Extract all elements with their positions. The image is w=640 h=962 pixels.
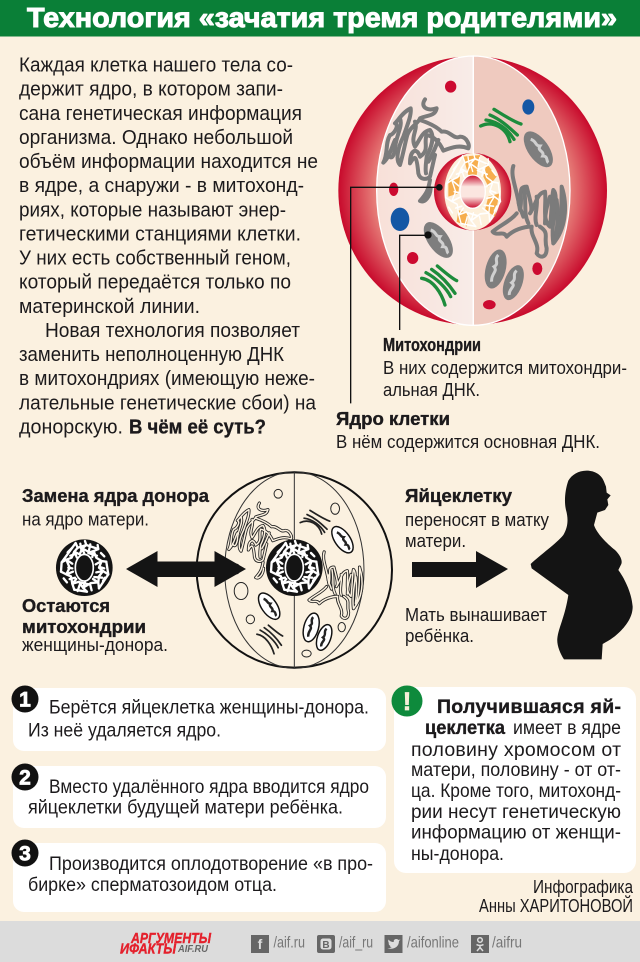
step 2 badge: 2: [19, 766, 31, 790]
conclusion panel: рии несут генетическую: [411, 801, 621, 823]
mother nucleus icon: [56, 539, 113, 596]
conclusion panel: ны-донора.: [411, 843, 504, 865]
intro text block: Новая технология позволяет: [45, 319, 301, 342]
intro text block: объём информации находится не: [19, 150, 318, 173]
exclamation badge: !: [403, 688, 411, 716]
intro text block: Каждая клетка нашего тела со-: [19, 54, 293, 76]
caption: egg transfer: [405, 486, 549, 551]
intro text block: донорскую.: [19, 415, 123, 438]
cell nucleus: [434, 153, 511, 230]
social: facebook: f: [258, 936, 263, 952]
publisher logo: AIF.RU: [177, 944, 209, 955]
caption: carrying the child: [405, 605, 547, 646]
social: odnoklassniki: /aifru: [492, 934, 522, 952]
social: twitter: [384, 934, 459, 953]
label: mitochondria: В них содержится митохондри-: [383, 358, 627, 378]
social: facebook: [251, 934, 305, 953]
step 3 badge: [12, 840, 38, 866]
social: vk: /aif_ru: [339, 934, 373, 952]
line-art donor cell: [197, 472, 392, 668]
social: twitter: /aifonline: [407, 934, 459, 952]
caption: egg transfer: Яйцеклетку: [405, 486, 512, 506]
caption: nucleus replacement: на ядро матери.: [22, 510, 149, 530]
step 3: [12, 840, 386, 912]
conclusion panel: информацию от женщи-: [411, 822, 621, 844]
conclusion panel: Получившаяся яй-: [437, 696, 621, 718]
step 3 badge: 3: [19, 842, 31, 866]
intro text block: [19, 54, 318, 438]
credit: [479, 877, 634, 916]
step 3: бирке» сперматозоидом отца.: [28, 874, 277, 896]
step 1: [12, 686, 386, 751]
organelles: green stacks: [422, 109, 521, 305]
double-headed arrow: [126, 551, 246, 587]
intro text block: лательные генетические сбои) на: [19, 391, 317, 414]
step 1: Берётся яйцеклетка женщины-донора.: [49, 696, 369, 718]
conclusion panel: [392, 686, 636, 873]
step 3: Производится оплодотворение «в про-: [49, 853, 373, 875]
conclusion panel: половину хромосом от: [411, 739, 621, 761]
caption: remaining mitochondria: митохондрии: [22, 617, 146, 637]
label: cell nucleus: Ядро клетки: [336, 409, 450, 429]
caption: carrying the child: ребёнка.: [405, 626, 474, 646]
intro text block: организма. Однако небольшой: [19, 126, 293, 149]
pointer lines: [351, 185, 442, 403]
step 2 badge: [12, 764, 38, 790]
step 1: Из неё удаляется ядро.: [28, 720, 221, 742]
colour cell diagram: [338, 56, 607, 403]
social: facebook: /aif.ru: [274, 934, 305, 952]
right arrow: [412, 551, 508, 588]
label: mitochondria: Митохондрии: [383, 335, 481, 355]
caption: nucleus replacement: [22, 486, 210, 530]
intro text block: сана генетическая информация: [19, 102, 302, 125]
conclusion panel: имеет в ядре: [513, 717, 621, 739]
publisher logo: АРГУМЕНТЫ: [130, 930, 212, 947]
social: odnoklassniki: [471, 934, 522, 953]
caption: egg transfer: матери.: [405, 531, 466, 551]
footer: [0, 921, 640, 962]
cell sphere: [338, 56, 607, 325]
organelles: red vesicles: [389, 81, 542, 309]
step 2: Вместо удалённого ядра вводится ядро: [49, 776, 369, 798]
intro text block: заменить неполноценную ДНК: [19, 343, 284, 366]
intro text block: держит ядро, в котором запи-: [19, 78, 283, 101]
step 1 badge: [12, 686, 38, 712]
label: mitochondria: альная ДНК.: [383, 380, 480, 400]
caption: remaining mitochondria: [22, 596, 168, 655]
publisher logo: [120, 930, 212, 958]
step 2: [12, 764, 386, 828]
intro text block: риях, которые называют энер-: [19, 198, 286, 221]
caption: egg transfer: переносят в матку: [405, 510, 549, 530]
pregnant woman silhouette: [531, 471, 633, 659]
conclusion panel: цеклетка: [425, 717, 505, 739]
intro text block: который передаётся только по: [19, 271, 291, 294]
intro text block: У них есть собственный геном,: [19, 246, 291, 270]
label: cell nucleus: [336, 409, 600, 452]
cytoplasm halves: [377, 56, 570, 325]
step 1 badge: 1: [19, 688, 31, 712]
step 2: яйцеклетки будущей матери ребёнка.: [28, 796, 343, 818]
exclamation badge: [392, 686, 422, 716]
caption: remaining mitochondria: женщины-донора.: [22, 635, 168, 655]
intro text block: в ядре, а снаружи - в митохонд-: [19, 174, 304, 197]
intro text block: в митохондриях (имеющую нежe-: [19, 367, 315, 390]
intro text block: гетическими станциями клетки.: [19, 222, 301, 245]
caption: nucleus replacement: Замена ядра донора: [22, 486, 210, 506]
social: vk: [317, 934, 373, 953]
social: vk: В: [322, 940, 330, 951]
intro text block: материнской линии.: [19, 295, 200, 318]
organelles: blue vesicles: [391, 99, 534, 231]
intro text block: В чём её суть?: [129, 415, 266, 438]
title band: Технология «зачатия тремя родителями»: [27, 2, 617, 33]
organelles: golgi: [383, 99, 565, 257]
conclusion panel: матери, половину - от от-: [411, 759, 621, 781]
publisher logo: ИФАКТЫ: [120, 940, 177, 958]
label: mitochondria: [383, 335, 627, 400]
caption: remaining mitochondria: Остаются: [22, 596, 110, 616]
organelles: mitochondria: [418, 126, 559, 303]
label: cell nucleus: В нём содержится основная ДНК.: [336, 432, 600, 452]
caption: carrying the child: Мать вынашивает: [405, 605, 547, 625]
